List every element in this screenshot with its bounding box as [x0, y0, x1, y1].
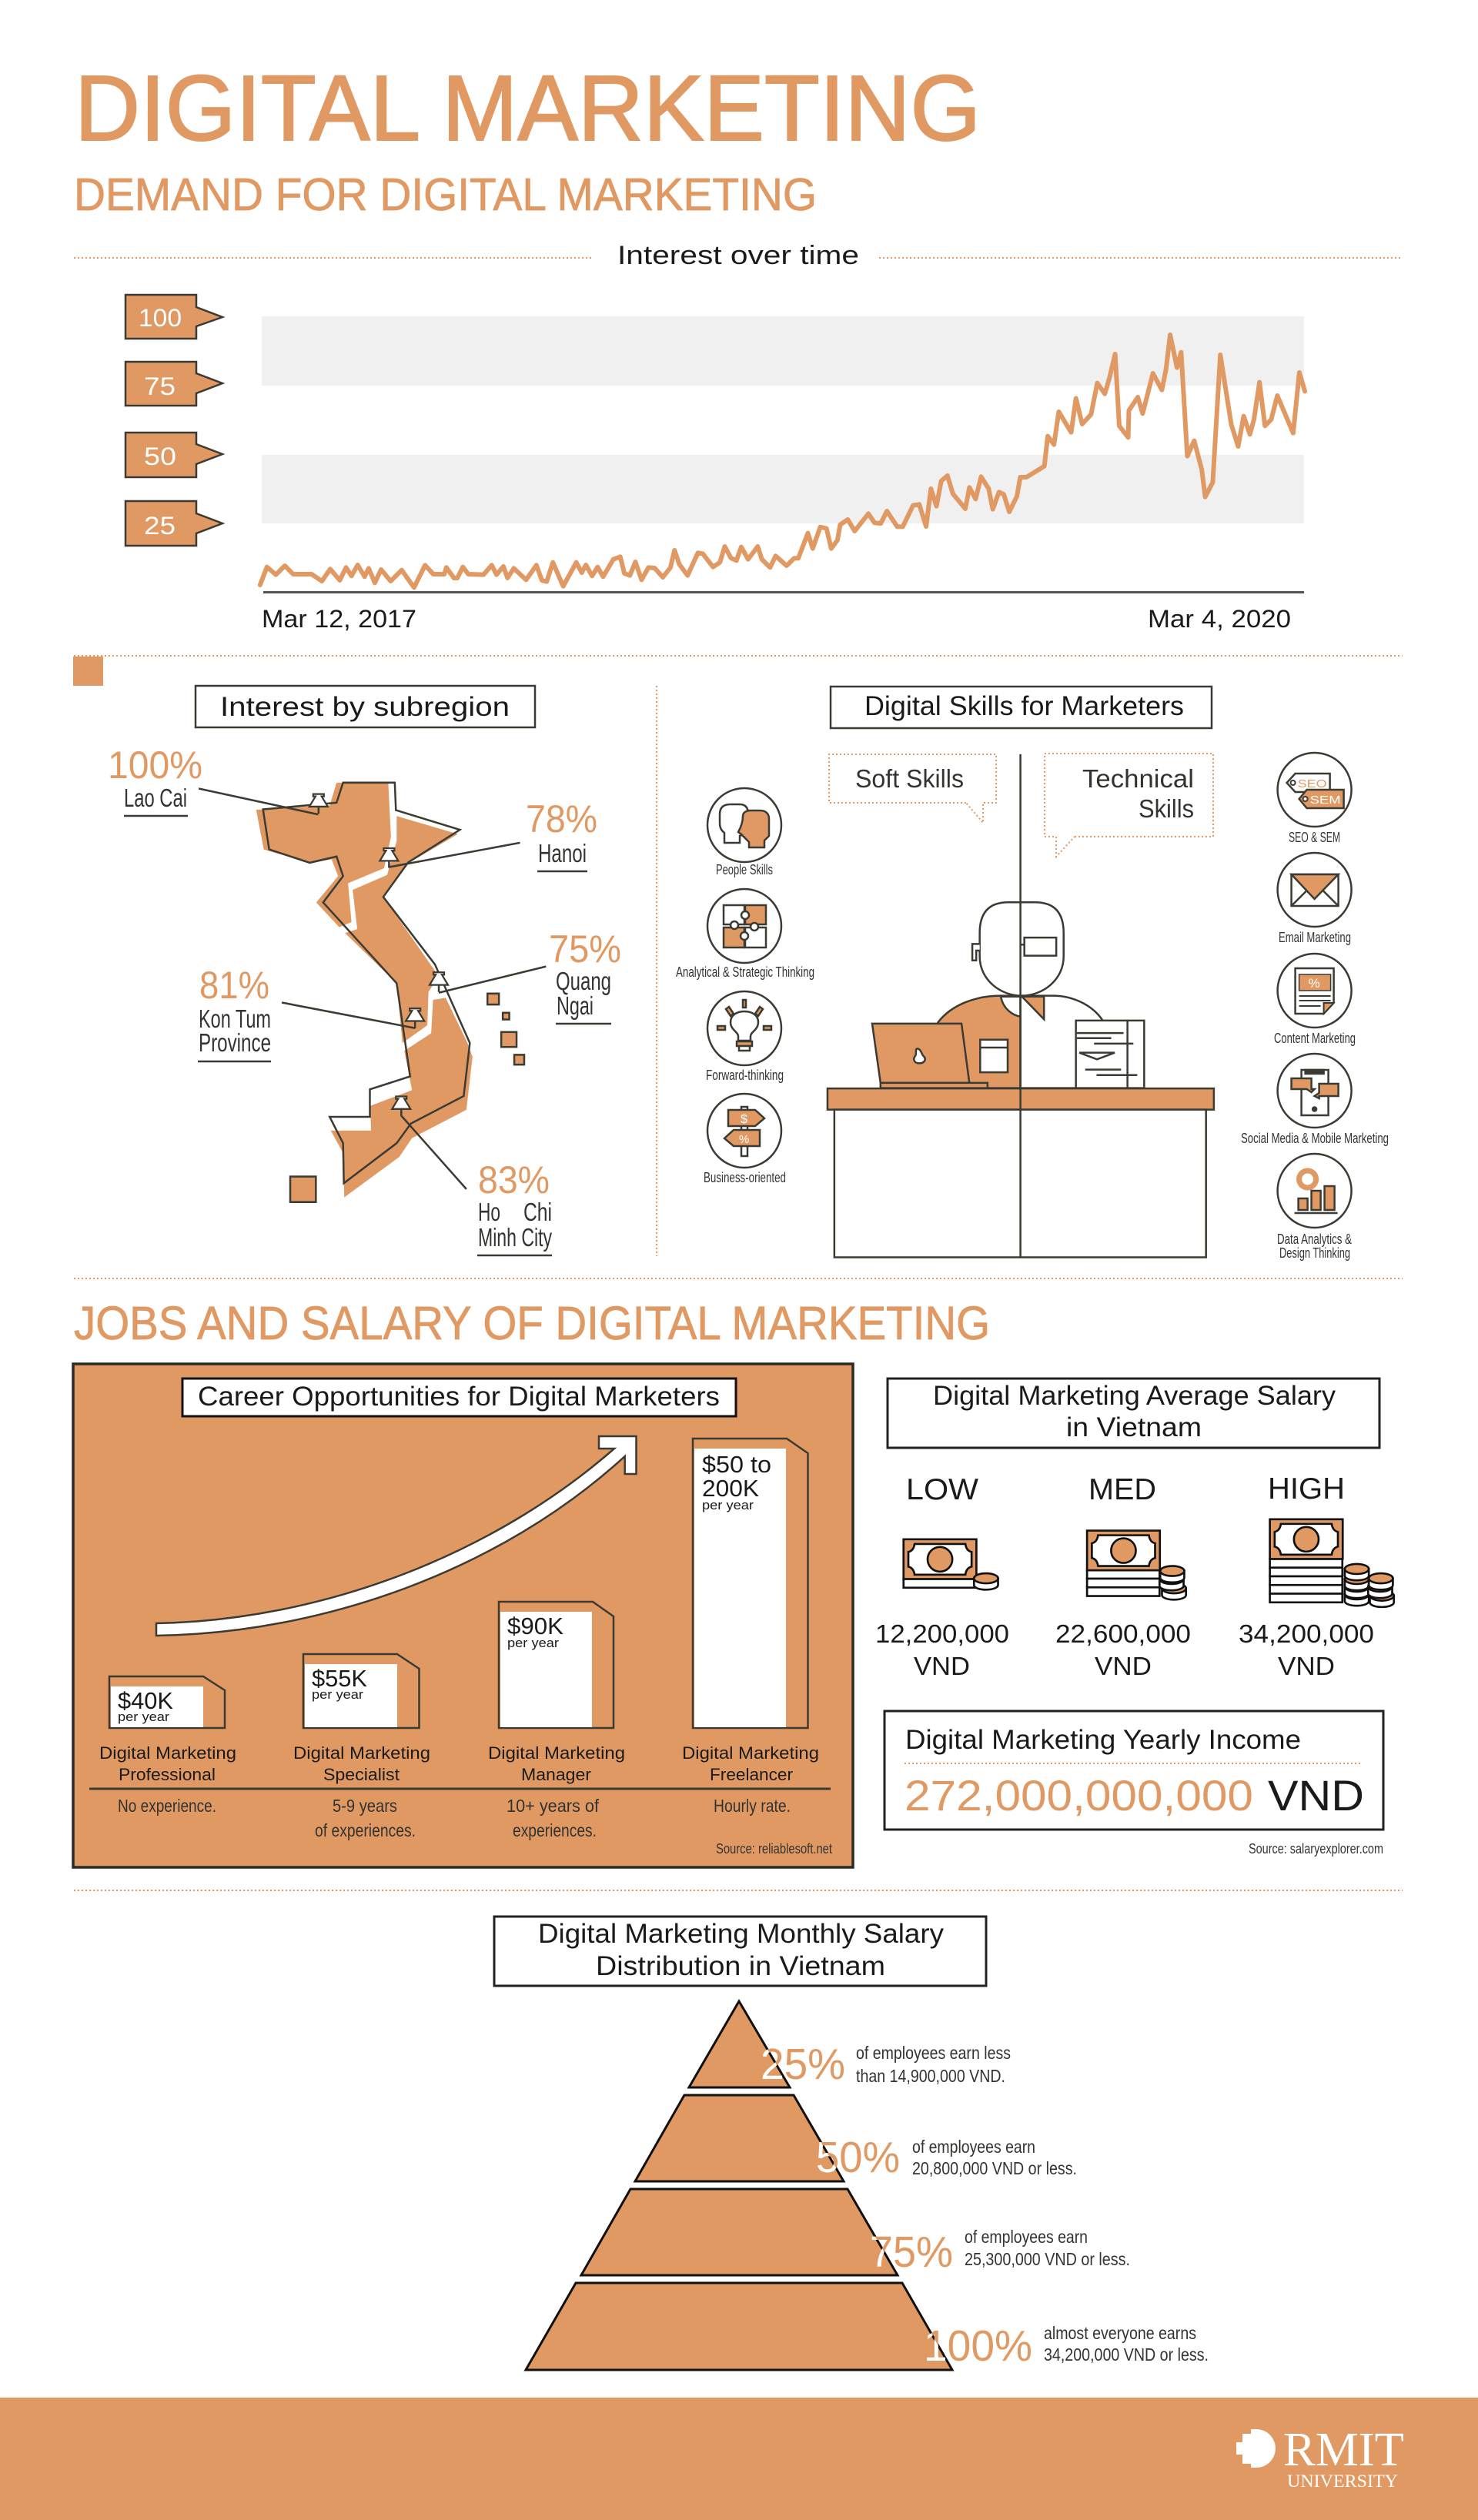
- tier: 100 percent: almost everyone earns: [1044, 2323, 1196, 2343]
- panel: yearly income: [884, 1711, 1383, 1830]
- logo: RMIT University: RMIT: [1283, 2424, 1404, 2476]
- icon: forward-thinking: [707, 991, 781, 1065]
- title: DIGITAL MARKETING: [75, 55, 981, 160]
- tier: 25 percent: of employees earn less: [856, 2043, 1011, 2063]
- callout: Kon Tum Province 81%: [198, 964, 271, 1061]
- label: manager: [488, 1743, 625, 1784]
- footer band: [0, 2398, 1478, 2520]
- text: experience levels: of experiences.: [315, 1820, 416, 1840]
- tier: 100 percent: 100%: [924, 2321, 1032, 2371]
- callout: Quang Ngai 75%: 75%: [549, 927, 621, 971]
- bar: professional: [109, 1676, 225, 1728]
- label: email marketing: Email Marketing: [1279, 930, 1351, 945]
- icon: social and mobile marketing: [1278, 1054, 1352, 1128]
- icon: business-oriented: %: [739, 1133, 749, 1146]
- source: reliablesoft: Source: reliablesoft.net: [716, 1841, 832, 1857]
- callout: Ho Chi Minh City 83%: Ho: [478, 1198, 500, 1226]
- icon: data analytics: [1278, 1154, 1352, 1228]
- illustration: person at desk: [828, 754, 1214, 1257]
- y axis tag: 75: 75: [144, 373, 176, 400]
- tier: 25 percent: 25%: [761, 2040, 845, 2089]
- bar: specialist: [303, 1654, 419, 1728]
- label: professional: Professional: [119, 1765, 216, 1784]
- icon: content marketing: %: [1309, 976, 1320, 991]
- callout: Lao Cai 100%: Lao Cai: [124, 784, 187, 812]
- heading: average salary: [888, 1379, 1379, 1448]
- tier: 25 percent: than 14,900,000 VND.: [856, 2066, 1005, 2086]
- bar: freelancer: per year: [702, 1498, 754, 1512]
- callout: Quang Ngai 75%: Ngai: [557, 991, 594, 1020]
- source: salaryexplorer: Source: salaryexplorer.com: [1249, 1841, 1383, 1857]
- callout: Hanoi 78%: Hanoi: [538, 839, 587, 867]
- label: specialist: [293, 1743, 430, 1784]
- tier: 100 percent: 34,200,000 VND or less.: [1044, 2345, 1209, 2365]
- label: high: HIGH: [1268, 1472, 1345, 1506]
- logo: RMIT University: [1236, 2424, 1404, 2491]
- arrow: career growth: [156, 1436, 636, 1636]
- callout: Ho Chi Minh City 83%: Chi: [523, 1198, 552, 1226]
- tier: 25 percent: 25%: [761, 2040, 845, 2089]
- callout: Hanoi 78%: 78%: [526, 797, 597, 841]
- map: Vietnam: [199, 783, 546, 1202]
- callout: Lao Cai 100%: [108, 744, 202, 816]
- bar: manager: [499, 1602, 614, 1728]
- text: experience levels: 5-9 years: [333, 1796, 397, 1816]
- value: low salary: VND: [914, 1652, 970, 1680]
- heading: monthly salary: Digital Marketing Monthly Salary: [538, 1919, 945, 1949]
- text: experience levels: Hourly rate.: [714, 1796, 791, 1816]
- icon: SEO and SEM: SEO: [1298, 777, 1327, 790]
- callout: technical skills: Skills: [1139, 794, 1194, 823]
- icon: high cash: [1270, 1519, 1394, 1607]
- label: freelancer: Freelancer: [710, 1765, 793, 1784]
- panel: yearly income: Digital Marketing Yearly Income: [905, 1725, 1301, 1755]
- label: data analytics: Design Thinking: [1279, 1245, 1350, 1261]
- callout: Quang Ngai 75%: [549, 927, 621, 1024]
- heading: digital skills: Digital Skills for Marketers: [864, 691, 1184, 721]
- heading: digital skills: [831, 687, 1212, 728]
- line: interest trend: [260, 335, 1305, 587]
- bar: professional: per year: [118, 1710, 169, 1724]
- icon: business-oriented: $: [741, 1113, 747, 1126]
- heading: monthly salary: Distribution in Vietnam: [596, 1951, 885, 1981]
- tier: 50 percent: 20,800,000 VND or less.: [912, 2158, 1077, 2178]
- callout: Ho Chi Minh City 83%: [477, 1158, 552, 1255]
- icon: people skills: [707, 788, 781, 862]
- label: data analytics: [1277, 1232, 1352, 1261]
- label: social and mobile marketing: Social Media & Mobile Marketing: [1241, 1131, 1389, 1146]
- bar: specialist: $55K: [312, 1665, 367, 1692]
- icon: SEO and SEM: [1278, 753, 1352, 827]
- icon: email marketing: [1278, 853, 1352, 927]
- bar: freelancer: 200K: [702, 1475, 759, 1502]
- text: experience levels: experiences.: [513, 1820, 597, 1840]
- tier: 50 percent: of employees earn: [912, 2137, 1035, 2157]
- panel: career opportunities: [73, 1364, 853, 1867]
- tier: 50 percent: [818, 2140, 1076, 2177]
- value: med salary: 22,600,000: [1055, 1619, 1191, 1648]
- callout: Ho Chi Minh City 83%: 83%: [478, 1158, 550, 1202]
- callout: technical skills: [1045, 754, 1213, 857]
- heading: demand for digital marketing: DEMAND FOR DIGITAL MARKETING: [74, 169, 817, 220]
- label: specialist: Specialist: [323, 1765, 400, 1784]
- label: med: MED: [1088, 1473, 1156, 1506]
- panel: digital skills for marketers: [676, 687, 1389, 1261]
- value: med salary: VND: [1095, 1652, 1152, 1680]
- callout: technical skills: Technical: [1082, 764, 1194, 793]
- label: forward-thinking: Forward-thinking: [706, 1068, 784, 1083]
- y axis tag: 50: 50: [144, 443, 176, 470]
- callout: Kon Tum Province 81%: Kon Tum: [199, 1004, 271, 1033]
- pyramid chart: [526, 2001, 952, 2370]
- heading: career opportunities: Career Opportunities for Digital Marketers: [198, 1382, 720, 1412]
- label: freelancer: Digital Marketing: [682, 1743, 819, 1763]
- logo: RMIT University: UNIVERSITY: [1287, 2472, 1398, 2491]
- bar: professional: $40K: [118, 1687, 173, 1714]
- callout: soft skills: Soft Skills: [855, 764, 964, 793]
- icon: analytical thinking: [707, 889, 781, 963]
- bar: freelancer: [693, 1439, 808, 1728]
- label: specialist: Digital Marketing: [293, 1743, 430, 1763]
- panel: yearly income: VND: [1268, 1771, 1364, 1820]
- text: experience levels: No experience.: [118, 1796, 216, 1816]
- chart: interest over time: [125, 295, 1305, 633]
- tier: 25 percent: [762, 2046, 1010, 2084]
- label: people skills: People Skills: [716, 862, 773, 877]
- heading: jobs and salary: JOBS AND SALARY OF DIGITAL MARKETING: [74, 1297, 990, 1349]
- value: high salary: [1239, 1619, 1374, 1680]
- label: content marketing: Content Marketing: [1274, 1031, 1356, 1046]
- callout: Ho Chi Minh City 83%: Minh City: [478, 1223, 552, 1252]
- heading: average salary: in Vietnam: [1066, 1412, 1202, 1442]
- value: low salary: [875, 1619, 1009, 1680]
- value: high salary: 34,200,000: [1239, 1619, 1374, 1648]
- callout: Kon Tum Province 81%: 81%: [199, 964, 269, 1007]
- y axis tag: 25: [125, 501, 222, 546]
- label: business-oriented: Business-oriented: [704, 1170, 786, 1185]
- y axis tag: 100: [125, 295, 222, 339]
- value: high salary: VND: [1278, 1652, 1335, 1680]
- panel: interest by subregion: [108, 686, 621, 1255]
- label: manager: Digital Marketing: [488, 1743, 625, 1763]
- text: experience levels: [118, 1796, 791, 1840]
- tier: 75 percent: [871, 2230, 1129, 2268]
- label: professional: [99, 1743, 236, 1784]
- tier: 50 percent: 50%: [816, 2133, 900, 2182]
- callout: Lao Cai 100%: 100%: [108, 744, 202, 787]
- panel: monthly salary distribution: [494, 1917, 1209, 2371]
- heading: average salary: Digital Marketing Average Salary: [933, 1381, 1336, 1411]
- bar: freelancer: $50 to: [702, 1451, 771, 1478]
- text: experience levels: 10+ years of: [507, 1796, 600, 1816]
- section marker square: [73, 657, 103, 686]
- heading: monthly salary: [494, 1917, 986, 1986]
- y axis tag: 25: 25: [144, 512, 176, 540]
- label: manager: Manager: [521, 1765, 591, 1784]
- icon: content marketing: [1278, 954, 1352, 1028]
- label: freelancer: [682, 1743, 819, 1784]
- label: professional: Digital Marketing: [99, 1743, 236, 1763]
- label: analytical thinking: Analytical & Strategic Thinking: [676, 964, 814, 980]
- value: low salary: 12,200,000: [875, 1619, 1009, 1648]
- bar: specialist: per year: [312, 1687, 363, 1702]
- x axis label: end date: Mar 4, 2020: [1148, 605, 1291, 633]
- panel: yearly income: 272,000,000,000: [905, 1771, 1253, 1820]
- y axis tag: 50: [125, 433, 222, 477]
- heading: interest over time: Interest over time: [617, 241, 859, 270]
- x axis label: start date: Mar 12, 2017: [262, 605, 416, 633]
- tier: 50 percent: 50%: [816, 2133, 900, 2182]
- callout: Hanoi 78%: [526, 797, 597, 871]
- panel: average salary: [875, 1379, 1394, 1857]
- tier: 100 percent: [927, 2326, 1207, 2363]
- label: low: LOW: [906, 1473, 978, 1506]
- bar: manager: $90K: [507, 1613, 563, 1639]
- callout: Quang Ngai 75%: Quang: [556, 967, 611, 995]
- bar: manager: per year: [507, 1636, 559, 1650]
- icon: low cash: [904, 1539, 998, 1589]
- tier: 75 percent: 25,300,000 VND or less.: [965, 2249, 1130, 2269]
- heading: interest by subregion: [196, 686, 535, 727]
- tier: 75 percent: of employees earn: [965, 2227, 1088, 2247]
- label: SEO and SEM: SEO & SEM: [1289, 830, 1340, 845]
- icon: med cash: [1087, 1531, 1186, 1599]
- callout: Kon Tum Province 81%: Province: [199, 1028, 271, 1057]
- tier: 100 percent: 100%: [924, 2321, 1032, 2371]
- icon: business-oriented: [707, 1094, 781, 1168]
- callout: soft skills: [829, 754, 996, 823]
- y axis tag: 100: 100: [139, 304, 182, 332]
- value: med salary: [1055, 1619, 1191, 1680]
- tier: 75 percent: 75%: [870, 2228, 953, 2277]
- icon: SEO and SEM: SEM: [1310, 794, 1341, 807]
- label: data analytics: Data Analytics &: [1277, 1232, 1352, 1247]
- y axis tag: 75: [125, 362, 222, 406]
- heading: interest by subregion: Interest by subregion: [220, 692, 510, 722]
- tier: 75 percent: 75%: [870, 2228, 953, 2277]
